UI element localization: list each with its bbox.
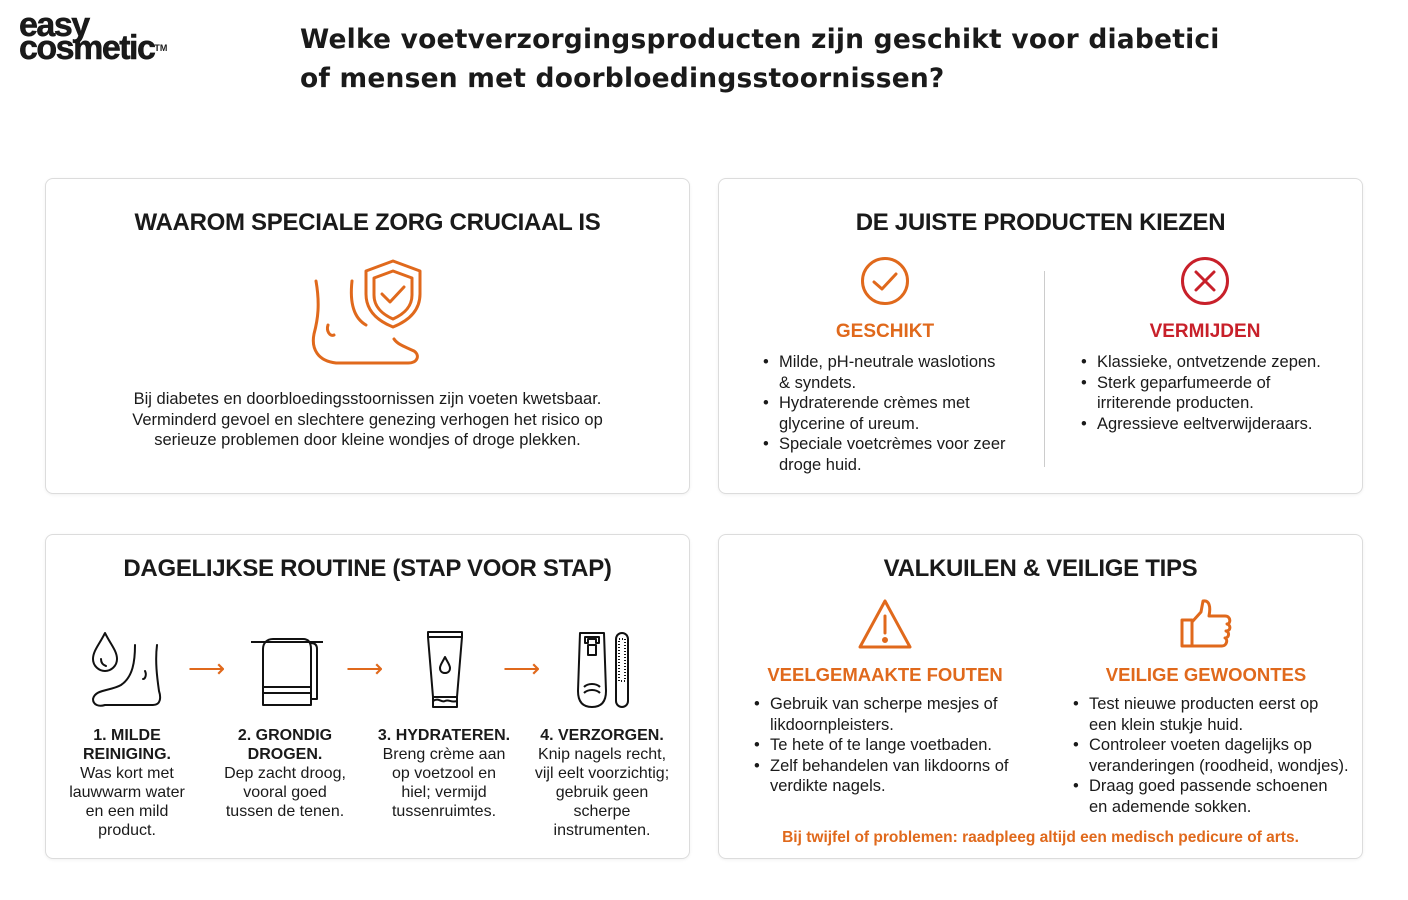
list: vermijden: irriterende producten. bbox=[1097, 394, 1254, 412]
step 2: DROGEN. bbox=[248, 746, 322, 763]
panel: waarom speciale zorg bbox=[45, 178, 690, 494]
subheading: vermijden: VERMIJDEN bbox=[1150, 321, 1260, 342]
list: vermijden: Sterk geparfumeerde of bbox=[1097, 374, 1270, 392]
heading: DE JUISTE PRODUCTEN KIEZEN bbox=[856, 209, 1225, 236]
icon: drop & foot bbox=[92, 632, 162, 707]
heading: DAGELIJKSE ROUTINE (STAP VOOR STAP) bbox=[123, 555, 612, 582]
icon: cross bbox=[1181, 257, 1229, 305]
logo: easy bbox=[19, 6, 89, 44]
list: fouten bbox=[754, 695, 1008, 795]
panel: valkuilen bbox=[718, 534, 1363, 859]
text block: serieuze problemen door kleine wondjes of droge plekken. bbox=[154, 431, 581, 449]
subheading: fouten: VEELGEMAAKTE FOUTEN bbox=[767, 664, 1003, 685]
list: fouten: Te hete of te lange voetbaden. bbox=[770, 736, 992, 754]
step 2: 2. GRONDIG bbox=[238, 727, 332, 744]
subheading: geschikt: GESCHIKT bbox=[836, 321, 934, 342]
list: fouten: Gebruik van scherpe mesjes of likdoornpleisters. bbox=[770, 695, 997, 734]
text block: Verminderd gevoel en slechtere genezing verhogen het risico op bbox=[132, 410, 603, 428]
list: geschikt: Speciale voetcrèmes voor zeer droge huid. bbox=[779, 435, 1006, 474]
icon: warning bbox=[858, 599, 912, 648]
step 1 bbox=[69, 727, 185, 839]
step 3: Breng crème aan op voetzool en hiel; vermijd tussenruimtes. bbox=[383, 746, 505, 820]
arrow: ⟶ bbox=[346, 653, 383, 683]
list: gewoontes: een klein stukje huid. bbox=[1089, 716, 1243, 734]
list: gewoontes bbox=[1074, 695, 1349, 816]
list: vermijden bbox=[1082, 353, 1321, 432]
list: fouten: Zelf behandelen van likdoorns of verdikte nagels. bbox=[770, 756, 1008, 795]
list: vermijden: Klassieke, ontvetzende zepen. bbox=[1097, 353, 1321, 371]
list: geschikt bbox=[764, 353, 1006, 474]
arrow: ⟶ bbox=[503, 653, 540, 683]
list: geschikt: Milde, pH-neutrale waslotions bbox=[779, 353, 995, 371]
list: gewoontes: Draag goed passende schoenen bbox=[1089, 777, 1328, 795]
step 4: Knip nagels recht, vijl eelt voorzichtig; gebruik geen scherpe instrumenten. bbox=[535, 746, 669, 839]
list: gewoontes: Controleer voeten dagelijks op veranderingen (roodheid, wondjes). bbox=[1089, 736, 1349, 774]
step 1: 1. MILDE bbox=[93, 727, 161, 744]
step 3: 3. HYDRATEREN. bbox=[378, 727, 510, 744]
step 4: 4. VERZORGEN. bbox=[540, 727, 664, 744]
title bbox=[300, 24, 1220, 94]
heading: WAAROM SPECIALE ZORG CRUCIAAL IS bbox=[134, 209, 600, 236]
list: gewoontes: Test nieuwe producten eerst op bbox=[1089, 695, 1318, 713]
title: Welke voetverzorgingsproducten zijn geschikt voor diabetici bbox=[300, 24, 1220, 55]
list: geschikt: Hydraterende crèmes met glycerine of ureum. bbox=[779, 394, 970, 432]
list: geschikt: & syndets. bbox=[779, 374, 856, 392]
icon: towel bbox=[251, 638, 323, 706]
list: gewoontes: en ademende sokken. bbox=[1089, 798, 1251, 816]
panel: juiste producten bbox=[718, 178, 1363, 494]
logo: cosmeticTM bbox=[19, 29, 167, 67]
callout: Bij twijfel of problemen: raadpleeg altijd een medisch pedicure of arts. bbox=[782, 829, 1299, 846]
step 1: REINIGING. bbox=[83, 746, 171, 763]
step 2: Dep zacht droog, vooral goed tussen de tenen. bbox=[224, 765, 346, 820]
step 2 bbox=[224, 727, 346, 820]
icon: nail clipper & file bbox=[577, 632, 629, 708]
panel: dagelijkse routine bbox=[45, 534, 690, 859]
icon: cream tube bbox=[427, 631, 463, 708]
heading: VALKUILEN & VEILIGE TIPS bbox=[884, 555, 1197, 582]
icon: foot with shield bbox=[312, 260, 422, 364]
icon: check bbox=[861, 257, 909, 305]
logo bbox=[19, 6, 167, 67]
arrow: ⟶ bbox=[188, 653, 225, 683]
icon: thumbs up bbox=[1180, 599, 1232, 648]
subheading: gewoontes: VEILIGE GEWOONTES bbox=[1106, 664, 1306, 685]
text block bbox=[132, 390, 603, 449]
text block: Bij diabetes en doorbloedingsstoornissen zijn voeten kwetsbaar. bbox=[134, 390, 601, 408]
step 1: Was kort met lauwwarm water en een mild product. bbox=[69, 765, 185, 839]
list: vermijden: Agressieve eeltverwijderaars. bbox=[1097, 414, 1313, 432]
title: of mensen met doorbloedingsstoornissen? bbox=[300, 63, 944, 94]
